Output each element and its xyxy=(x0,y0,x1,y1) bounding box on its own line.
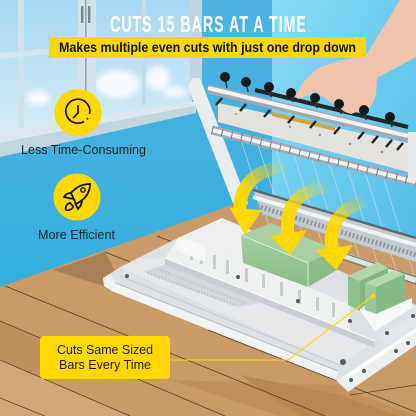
icon: clock xyxy=(54,89,102,136)
arrow 2 xyxy=(270,186,328,255)
title: CUTS 15 BARS AT A TIME xyxy=(110,13,306,38)
wall background xyxy=(0,0,416,300)
machine top blade assembly xyxy=(208,88,416,182)
hand xyxy=(295,0,416,114)
callout leader line xyxy=(170,294,375,360)
arrow 3 xyxy=(316,200,366,270)
icon: rocket xyxy=(54,174,100,220)
machine upper frame strut xyxy=(188,78,248,208)
subtitle banner: Makes multiple even cuts with just one drop down xyxy=(59,39,356,55)
cutting wires xyxy=(241,140,414,275)
label: less time-consuming: Less Time-Consuming xyxy=(21,142,146,157)
callout: Cuts Same Sized xyxy=(57,342,153,357)
window xyxy=(0,0,202,157)
callout: Bars Every Time xyxy=(59,357,151,372)
green soap bar, large xyxy=(241,223,337,287)
knobs xyxy=(220,72,395,127)
callout xyxy=(40,336,170,379)
subtitle banner xyxy=(49,37,366,58)
green soap bars, cut xyxy=(348,262,405,314)
machine base tray xyxy=(103,218,416,392)
arrow 1 xyxy=(230,166,285,235)
wood floor xyxy=(0,205,416,416)
machine middle rods xyxy=(253,190,416,284)
label: more efficient: More Efficient xyxy=(38,227,115,242)
